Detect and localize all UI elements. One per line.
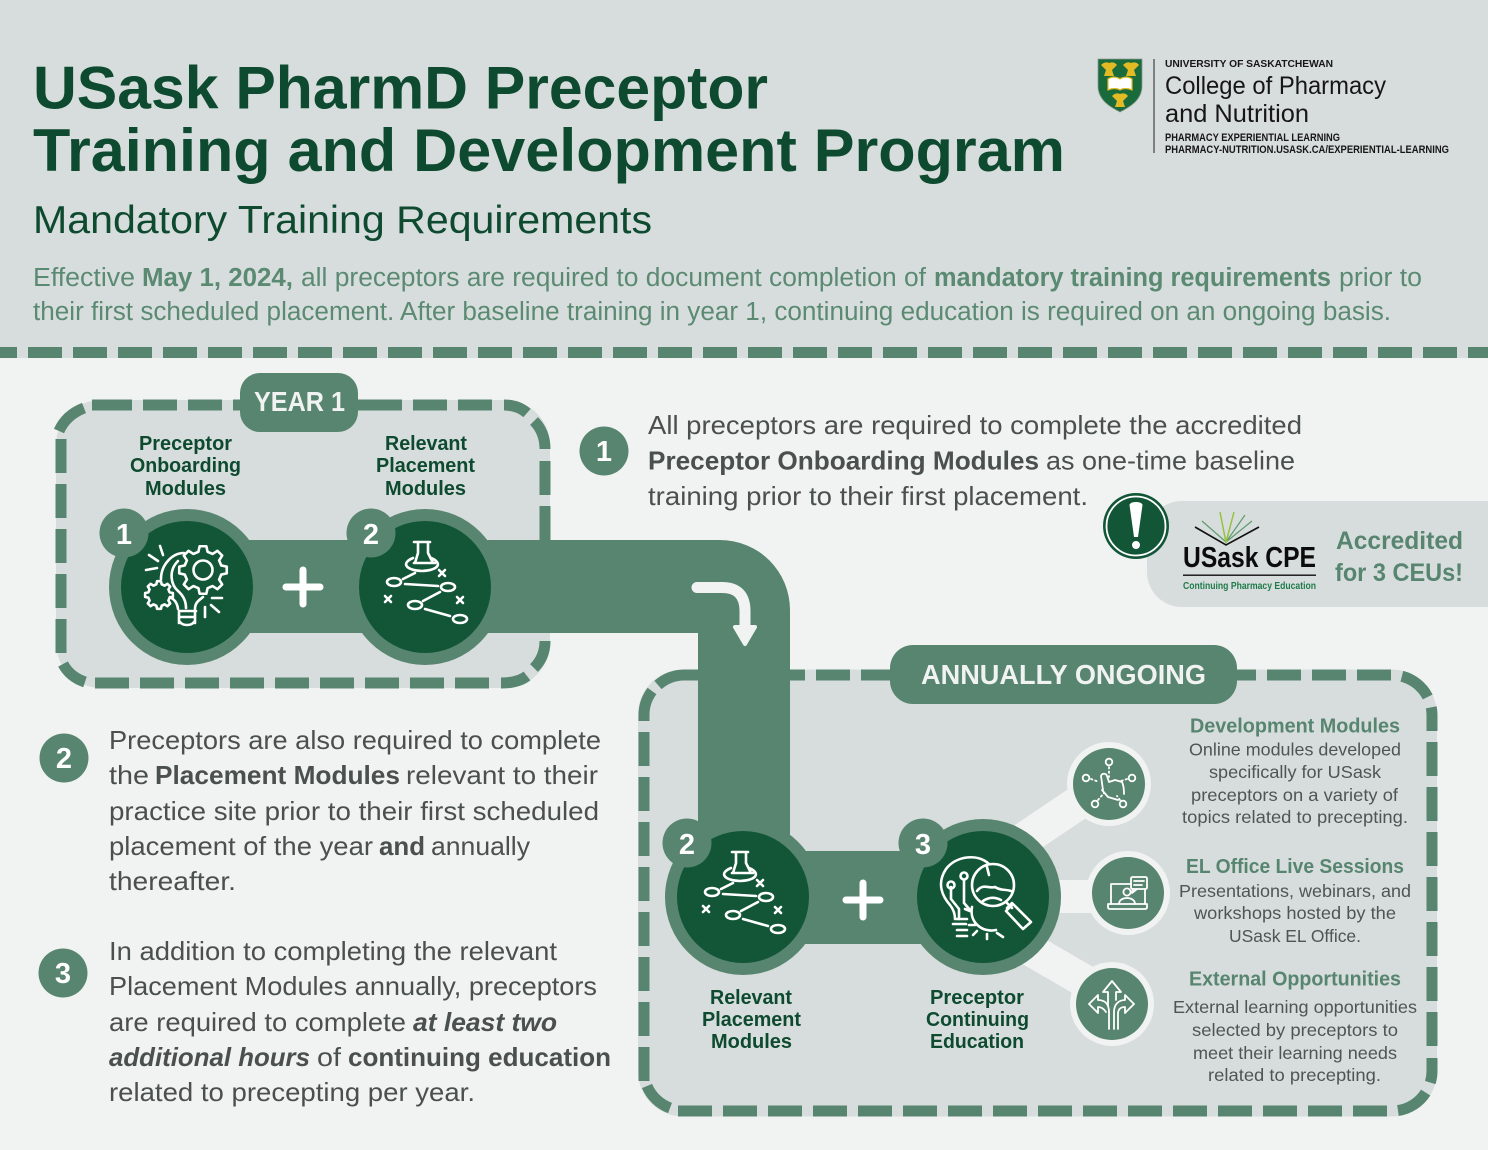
intro paragraph: May 1, 2024, xyxy=(142,264,293,292)
title: USask PharmD Preceptor xyxy=(33,54,768,122)
label: preceptor continuing education xyxy=(926,986,1029,1053)
intro paragraph: prior to xyxy=(1339,264,1422,292)
step 2 text: Placement Modules xyxy=(155,760,400,790)
node: relevant placement modules (annual) xyxy=(662,818,821,975)
icon: exclamation badge xyxy=(1103,493,1169,559)
connector: to development modules xyxy=(983,782,1109,867)
step 2 text: placement of the year xyxy=(109,831,373,861)
label: relevant placement modules (annual): Placement xyxy=(702,1008,801,1031)
label: relevant placement modules: Relevant xyxy=(385,432,467,455)
step 3 badge xyxy=(38,948,88,998)
icon: hand touching nodes xyxy=(1083,759,1135,807)
label: preceptor continuing education: Preceptor xyxy=(930,986,1024,1009)
label: preceptor onboarding modules xyxy=(130,432,241,500)
step 3 text: In addition to completing the relevant xyxy=(109,936,558,966)
connector: to EL office live sessions xyxy=(983,880,1128,913)
label: preceptor continuing education: Education xyxy=(930,1030,1024,1053)
year 1 pill xyxy=(240,373,358,432)
text: development modules: Development Modules xyxy=(1190,714,1400,738)
icon: branching arrows xyxy=(1089,981,1134,1029)
step 3 text: Placement Modules annually, preceptors xyxy=(109,971,597,1001)
title: Training and Development Program xyxy=(33,117,1065,184)
subtitle: Mandatory Training Requirements xyxy=(33,199,652,242)
step 3 badge: 3 xyxy=(55,958,71,990)
text: development modules: Online modules developed xyxy=(1189,740,1401,760)
intro paragraph: their first scheduled placement. After baseline training in year 1, continuing education is required on an ongoing basis. xyxy=(33,298,1391,326)
year 1 pill: YEAR 1 xyxy=(254,386,345,417)
step 2 text: and xyxy=(379,831,425,861)
text: external opportunities: External Opportunities xyxy=(1189,968,1401,990)
text: EL office live sessions: workshops hosted by the xyxy=(1193,903,1396,923)
logo: USask CPE: USask CPE xyxy=(1183,542,1316,574)
step 1 badge: 1 xyxy=(596,436,612,468)
plus: annual xyxy=(846,883,880,917)
intro paragraph xyxy=(33,264,1422,326)
icon: lightbulb with gears xyxy=(145,546,227,625)
node: EL office live sessions xyxy=(1086,851,1170,935)
intro paragraph: all preceptors are required to document completion of xyxy=(301,264,927,292)
logo: USask College of Pharmacy and Nutrition: and Nutrition xyxy=(1165,100,1309,128)
logo: USask CPE xyxy=(1183,512,1316,592)
step 1 text: Preceptor Onboarding Modules xyxy=(648,446,1039,476)
text: external opportunities: meet their learning needs xyxy=(1193,1043,1397,1063)
step 2 badge xyxy=(40,734,88,782)
annually ongoing pill xyxy=(890,645,1237,704)
text: external opportunities xyxy=(1173,968,1417,1085)
panel: annually ongoing xyxy=(638,670,1437,1116)
connector: to external opportunities xyxy=(983,922,1112,997)
icon: strategy map with pin xyxy=(385,542,467,623)
step 3 text xyxy=(109,936,611,1107)
step 2 text: annually xyxy=(431,831,530,861)
node: external opportunities xyxy=(1070,962,1154,1046)
pathway connector between year 1 and annual xyxy=(185,540,790,945)
step 1 text xyxy=(648,410,1302,511)
annually ongoing pill: ANNUALLY ONGOING xyxy=(921,659,1206,690)
step 1 badge xyxy=(580,426,628,476)
icon: strategy map with pin xyxy=(703,852,785,933)
node: relevant placement modules (annual): 2 xyxy=(679,829,695,861)
logo: USask College of Pharmacy and Nutrition: PHARMACY-NUTRITION.USASK.CA/EXPERIENTIAL-LEARNING xyxy=(1165,144,1449,156)
callout: accredited for 3 CEUs: for 3 CEUs! xyxy=(1335,559,1463,587)
node: preceptor onboarding modules: 1 xyxy=(116,519,132,551)
step 2 text xyxy=(109,725,601,896)
node: preceptor continuing education xyxy=(898,818,1061,975)
step 2 text: the xyxy=(109,760,149,790)
text: development modules: specifically for USask xyxy=(1209,762,1381,782)
label: relevant placement modules: Modules xyxy=(385,477,466,500)
text: development modules: topics related to precepting. xyxy=(1182,807,1408,827)
step 3 text: at least two xyxy=(413,1007,557,1037)
label: relevant placement modules xyxy=(376,432,475,500)
node: relevant placement modules (year 1) xyxy=(346,508,503,665)
text: development modules xyxy=(1182,714,1408,827)
text: EL office live sessions xyxy=(1179,855,1411,946)
node: development modules xyxy=(1067,742,1151,826)
icon: bulb with magnifier and gear xyxy=(941,857,1031,939)
text: EL office live sessions: EL Office Live Sessions xyxy=(1186,855,1404,878)
step 3 text: additional hours xyxy=(109,1042,310,1072)
callout: accredited for 3 CEUs xyxy=(1103,493,1488,607)
label: preceptor onboarding modules: Onboarding xyxy=(130,454,241,477)
node: preceptor onboarding modules xyxy=(100,508,265,665)
step 3 text: of xyxy=(317,1042,342,1072)
label: relevant placement modules (annual): Relevant xyxy=(710,986,792,1009)
text: development modules: preceptors on a variety of xyxy=(1191,785,1398,805)
label: relevant placement modules (annual): Modules xyxy=(711,1030,792,1053)
icon: university shield xyxy=(1098,59,1142,112)
node: relevant placement modules (year 1): 2 xyxy=(363,519,379,551)
logo: USask College of Pharmacy and Nutrition: UNIVERSITY OF SASKATCHEWAN xyxy=(1165,59,1333,70)
step 3 text: continuing education xyxy=(348,1042,611,1072)
annual connector bar xyxy=(743,851,983,944)
text: EL office live sessions: USask EL Office. xyxy=(1229,926,1361,946)
step 2 text: practice site prior to their first scheduled xyxy=(109,796,599,826)
intro paragraph: mandatory training requirements xyxy=(934,264,1331,292)
step 1 text: training prior to their first placement. xyxy=(648,481,1088,511)
label: relevant placement modules (annual) xyxy=(702,986,801,1053)
text: external opportunities: related to precepting. xyxy=(1208,1065,1381,1085)
step 3 text: are required to complete xyxy=(109,1007,406,1037)
arrow: flow downward xyxy=(697,588,755,644)
label: relevant placement modules: Placement xyxy=(376,454,475,477)
text: external opportunities: External learning opportunities xyxy=(1173,997,1417,1017)
step 1 text: All preceptors are required to complete the accredited xyxy=(648,410,1302,440)
step 1 text: as one-time baseline xyxy=(1046,446,1295,476)
logo: USask College of Pharmacy and Nutrition: College of Pharmacy xyxy=(1165,72,1386,100)
text: EL office live sessions: Presentations, webinars, and xyxy=(1179,881,1411,901)
label: preceptor continuing education: Continuing xyxy=(926,1008,1029,1031)
logo: USask CPE: Continuing Pharmacy Education xyxy=(1183,580,1316,592)
text: external opportunities: selected by preceptors to xyxy=(1192,1020,1398,1040)
plus: year 1 xyxy=(286,570,320,604)
step 2 text: relevant to their xyxy=(406,760,598,790)
node: preceptor continuing education: 3 xyxy=(915,829,931,861)
title xyxy=(33,54,1065,184)
header panel xyxy=(0,0,1488,358)
logo: USask College of Pharmacy and Nutrition: PHARMACY EXPERIENTIAL LEARNING xyxy=(1165,132,1340,144)
panel: year 1 xyxy=(56,400,550,688)
callout: accredited for 3 CEUs: Accredited xyxy=(1336,527,1463,555)
logo: USask College of Pharmacy and Nutrition xyxy=(1098,59,1449,156)
label: preceptor onboarding modules: Preceptor xyxy=(139,432,232,455)
label: preceptor onboarding modules: Modules xyxy=(145,477,226,500)
step 2 text: Preceptors are also required to complete xyxy=(109,725,601,755)
icon: laptop with chat bubble xyxy=(1108,877,1147,909)
step 3 text: related to precepting per year. xyxy=(109,1077,475,1107)
step 2 badge: 2 xyxy=(56,743,72,775)
intro paragraph: Effective xyxy=(33,264,135,292)
step 2 text: thereafter. xyxy=(109,866,236,896)
